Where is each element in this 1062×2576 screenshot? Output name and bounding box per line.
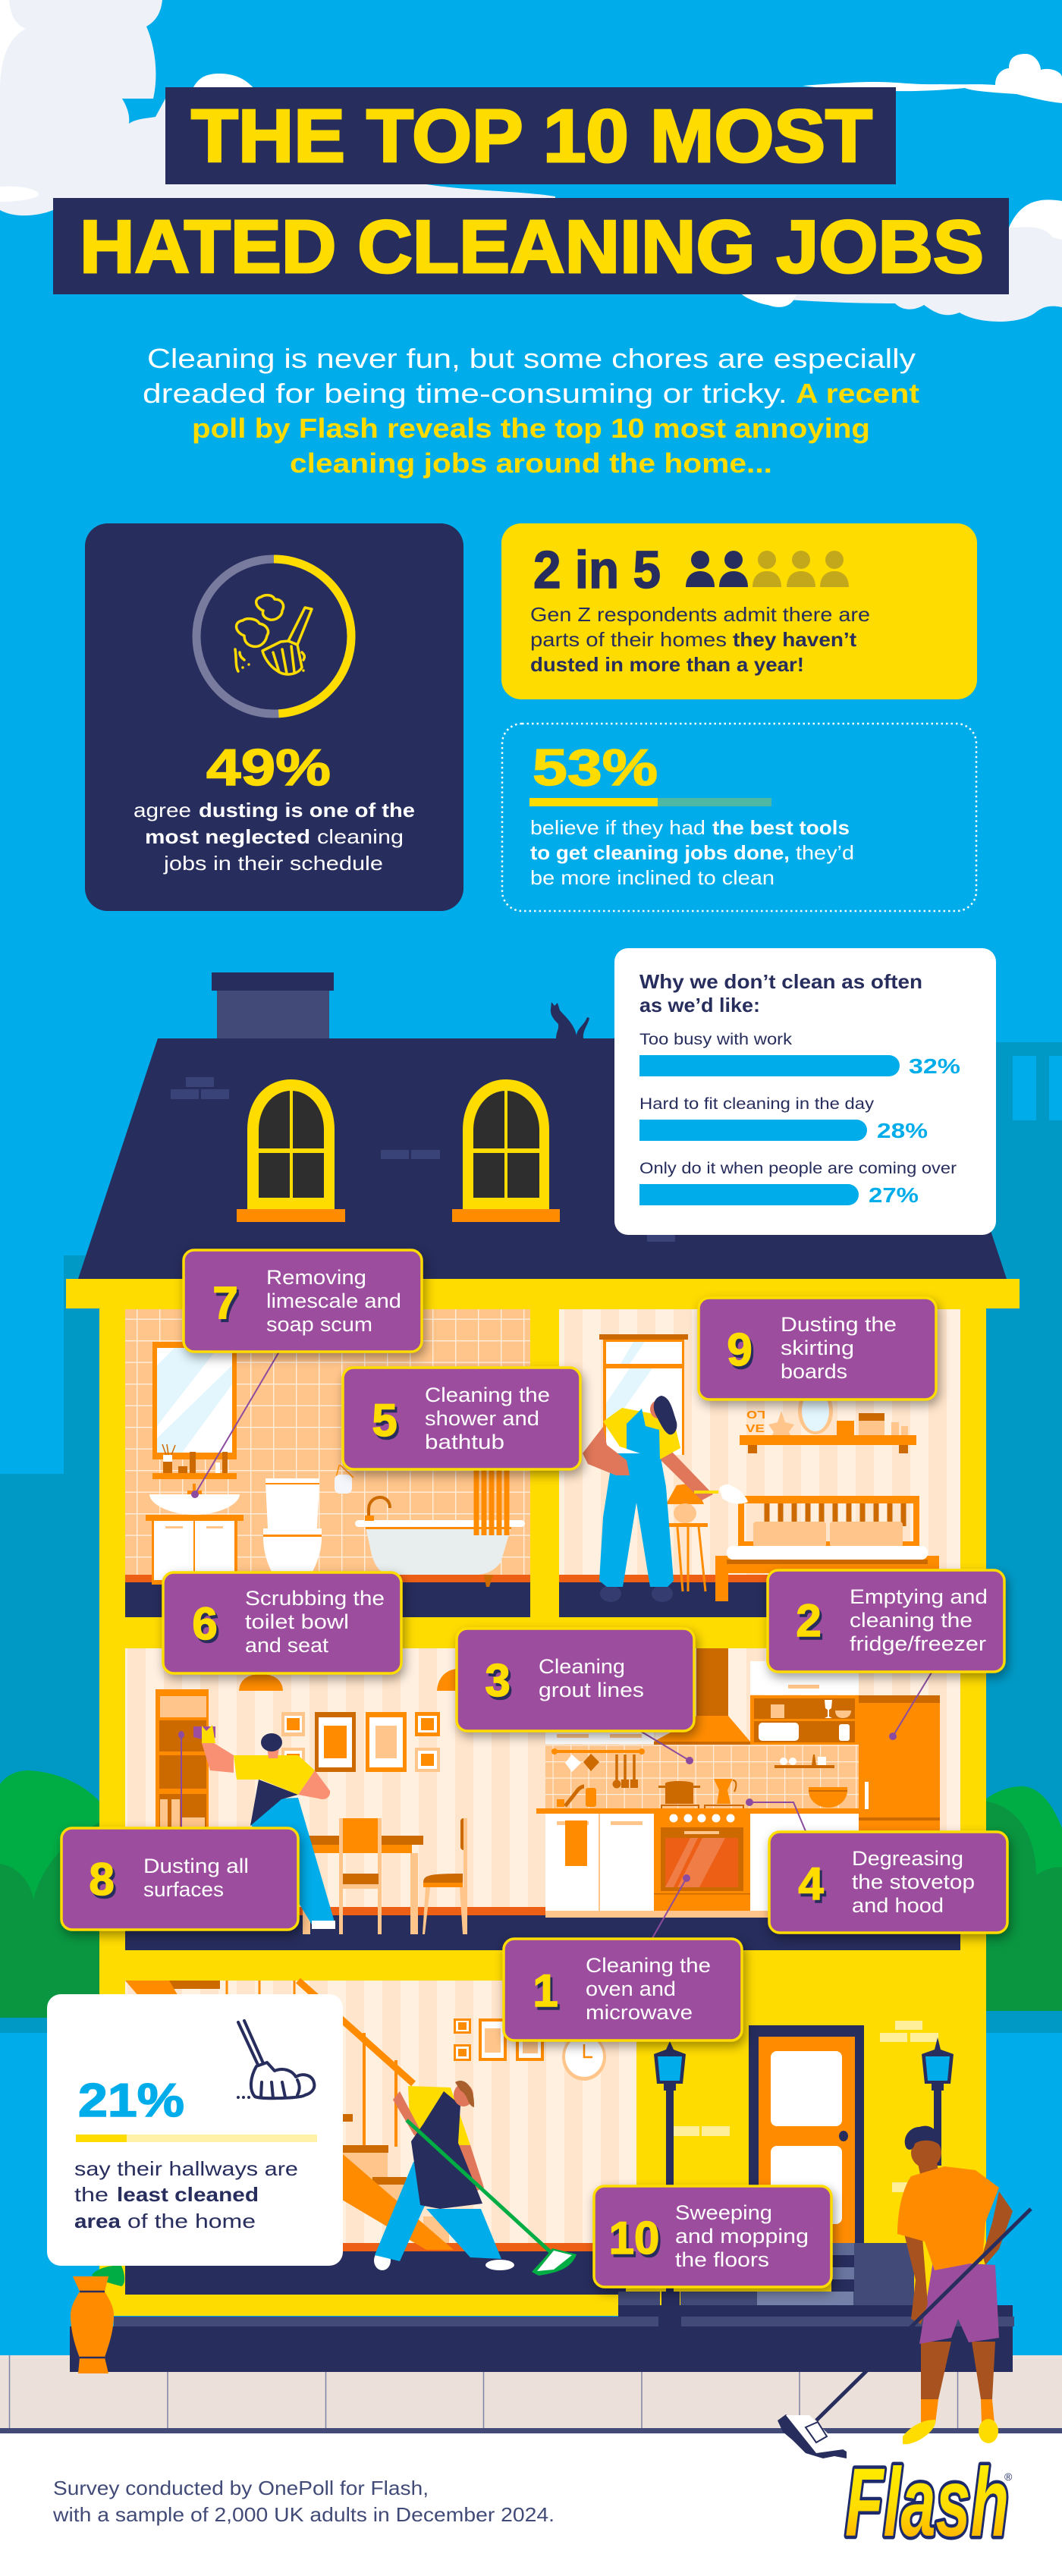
callout 7: 7	[215, 1280, 240, 1331]
callout 7	[184, 1250, 422, 1352]
callout 2	[768, 1570, 1004, 1672]
dusting stat text: cleaning	[317, 825, 404, 848]
icon: five people	[686, 551, 849, 587]
callout 7: soap scum	[266, 1313, 372, 1336]
stove pot and coffee maker	[658, 1779, 743, 1808]
clouds	[0, 0, 1062, 322]
roof	[78, 1038, 1007, 1279]
best tools text: be more inclined to clean	[530, 866, 775, 889]
bedroom shelf	[740, 1387, 916, 1453]
callout 7: 7	[212, 1277, 238, 1328]
vase with plant	[71, 2266, 124, 2373]
pavement	[0, 2355, 1062, 2576]
Gen Z text	[530, 603, 870, 676]
title: HATED CLEANING JOBS	[80, 205, 984, 288]
front door	[749, 2025, 864, 2243]
bedroom shelf: VE	[746, 1422, 765, 1435]
toilet	[263, 1478, 322, 1572]
dusting stat text: most neglected	[145, 825, 310, 848]
window right	[452, 1079, 560, 1222]
callout 4: the stovetop	[852, 1871, 975, 1893]
kitchen shelf and bowl	[775, 1755, 847, 1808]
picture frames	[281, 1712, 440, 1772]
panel: best tools stat	[502, 724, 976, 911]
21 percent bar	[76, 2135, 317, 2142]
bedroom window	[599, 1334, 688, 1455]
hallways text: say their hallways are	[74, 2157, 298, 2180]
chart heading	[639, 970, 922, 1016]
icon: broom and dust	[235, 595, 312, 674]
house walls	[66, 1279, 1020, 2316]
callout 10	[594, 2186, 831, 2287]
window left	[237, 1079, 345, 1222]
21 percent: 21%	[78, 2075, 184, 2127]
title	[53, 87, 1009, 294]
bar: too busy with work: Too busy with work	[639, 1031, 793, 1048]
leader lines	[178, 1352, 932, 1938]
callout 8: Dusting all	[143, 1855, 249, 1877]
callout 5: bathtub	[425, 1431, 504, 1453]
intro paragraph: dreaded for being time-consuming or tricky.	[143, 378, 787, 409]
ceiling lamps	[239, 1669, 459, 1691]
chimney	[212, 972, 334, 1039]
best tools text: the best tools	[712, 816, 850, 839]
progress ring 49%	[196, 559, 351, 714]
callout 6: Scrubbing the	[245, 1587, 385, 1610]
53 percent: 53%	[533, 739, 658, 796]
Gen Z text: parts of their homes	[530, 628, 727, 651]
backsplash utensils	[551, 1748, 645, 1807]
bathroom room	[125, 1309, 530, 1617]
survey footnote: Survey conducted by OnePoll for Flash,	[53, 2477, 429, 2499]
lamp and stool	[666, 1483, 708, 1591]
callout 10: Sweeping	[675, 2201, 772, 2224]
sink	[146, 1484, 244, 1585]
bathtub	[355, 1470, 525, 1587]
callout 6: 6	[192, 1598, 218, 1649]
hallways text	[74, 2157, 298, 2232]
callout 10: and mopping	[675, 2225, 809, 2248]
panel: hallways stat	[47, 1994, 343, 2266]
bar: hard to fit cleaning: Hard to fit cleaning in the day	[639, 1095, 875, 1113]
kitchen and dining room	[125, 1648, 960, 1950]
callout 1: oven and	[586, 1978, 676, 2000]
intro paragraph: poll by Flash reveals the top 10 most annoying	[192, 413, 870, 444]
best tools text: to get cleaning jobs done,	[530, 841, 790, 864]
callout 5: 5	[374, 1398, 400, 1449]
callout 4: and hood	[852, 1894, 944, 1917]
dusting stat text	[134, 799, 415, 875]
survey footnote	[52, 2477, 555, 2526]
callout 2: fridge/freezer	[850, 1632, 986, 1655]
street lamp right	[922, 2037, 954, 2166]
callout 3	[457, 1629, 694, 1731]
survey footnote: with a sample of 2,000 UK adults in December 2024.	[52, 2503, 555, 2526]
bar: too busy with work	[639, 1031, 960, 1078]
callout 9: boards	[781, 1360, 847, 1383]
bar: only when people are coming over	[639, 1160, 957, 1207]
street lamp left	[654, 2041, 686, 2316]
woman dusting	[583, 1396, 748, 1602]
callout 3: grout lines	[539, 1679, 644, 1701]
bushes	[0, 1770, 1062, 2018]
callout 6	[163, 1572, 401, 1673]
callout 6: toilet bowl	[245, 1610, 349, 1633]
callout 2: Emptying and	[850, 1585, 988, 1608]
bedroom room	[559, 1309, 960, 1617]
callout 3: 3	[487, 1658, 513, 1709]
callout 10: 10	[609, 2213, 659, 2263]
background buildings	[0, 1042, 1062, 2033]
callout 8: 8	[89, 1854, 115, 1905]
bar: only when people are coming over: Only do it when people are coming over	[639, 1160, 957, 1177]
hallways text: of the home	[127, 2210, 256, 2232]
icon: mop	[238, 2021, 314, 2098]
callout 4: 4	[800, 1861, 826, 1912]
hallways text: the	[74, 2183, 108, 2206]
intro paragraph	[143, 343, 919, 479]
house front exterior	[70, 2021, 1014, 2372]
callout 8: 8	[91, 1857, 117, 1908]
bathroom shelf	[152, 1444, 237, 1479]
best tools text	[530, 816, 854, 889]
dining table and chairs	[298, 1818, 467, 1934]
callout 5: Cleaning the	[425, 1384, 550, 1406]
bar: only when people are coming over: 27%	[869, 1183, 919, 1207]
intro paragraph: A recent	[796, 378, 919, 409]
49 percent: 49%	[206, 739, 331, 796]
best tools text: they’d	[796, 841, 854, 864]
callout 6: and seat	[245, 1634, 329, 1657]
dusting stat text: agree	[134, 799, 191, 821]
panel: why we don't clean bar chart	[614, 948, 996, 1235]
kitchen units	[536, 1648, 859, 1918]
man with mop	[778, 2126, 1031, 2458]
callout 8	[61, 1828, 298, 1930]
callout 9: 9	[729, 1327, 755, 1378]
bookcase	[156, 1689, 209, 1830]
dusting stat text: jobs in their schedule	[163, 852, 383, 875]
callout 1: 1	[533, 1965, 558, 2016]
intro paragraph: Cleaning is never fun, but some chores are especially	[147, 343, 916, 374]
callout 6: 6	[194, 1601, 220, 1652]
callout 4: Degreasing	[852, 1847, 963, 1870]
callout 7: limescale and	[266, 1290, 401, 1312]
hallways text: area	[74, 2210, 121, 2232]
chart heading: Why we don’t clean as often	[639, 970, 922, 993]
Gen Z text: Gen Z respondents admit there are	[530, 603, 870, 626]
callout 9: Dusting the	[781, 1313, 897, 1336]
callout 10: the floors	[675, 2248, 769, 2271]
mirror	[152, 1342, 237, 1459]
callout 1: 1	[535, 1968, 561, 2019]
callout 3: 3	[485, 1655, 511, 1706]
hallway room	[125, 1981, 636, 2295]
cat on roof	[551, 1002, 589, 1038]
wall clock	[562, 2034, 606, 2081]
dusting stat text: dusting is one of the	[199, 799, 415, 821]
callout 3: Cleaning	[539, 1655, 625, 1678]
callout 8: surfaces	[143, 1878, 224, 1901]
callout 10: 10	[611, 2216, 661, 2267]
callout 4: 4	[798, 1858, 824, 1909]
chart heading: as we’d like:	[639, 994, 760, 1016]
bar: hard to fit cleaning: 28%	[877, 1119, 928, 1142]
intro paragraph: cleaning jobs around the home...	[290, 448, 772, 479]
53 percent bar	[529, 798, 771, 806]
woman mopping	[374, 2081, 577, 2276]
callout 5: shower and	[425, 1407, 539, 1430]
callout 2: 2	[796, 1595, 822, 1646]
callout 2: cleaning the	[850, 1609, 972, 1632]
callout 9: skirting	[781, 1337, 854, 1359]
callout 2: 2	[798, 1598, 824, 1649]
Flash logo: ®	[1004, 2471, 1013, 2483]
callout 9: 9	[727, 1324, 753, 1375]
panel: dusting stat	[85, 523, 463, 911]
hallway frames	[454, 2018, 544, 2061]
best tools text: believe if they had	[530, 816, 705, 839]
panel: Gen Z stat	[501, 523, 977, 699]
bedroom shelf: LO	[746, 1408, 765, 1421]
callout 5: 5	[372, 1395, 397, 1446]
callout 5	[343, 1368, 580, 1469]
Gen Z text: they haven’t	[733, 628, 856, 651]
bar: hard to fit cleaning	[639, 1095, 928, 1142]
2 in 5: 2 in 5	[533, 540, 661, 599]
bed	[715, 1496, 939, 1601]
callout 7: Removing	[266, 1266, 366, 1289]
callout 1: microwave	[586, 2001, 693, 2024]
callout 1	[504, 1939, 742, 2040]
bar: too busy with work: 32%	[909, 1054, 960, 1078]
hanging towel	[335, 1465, 353, 1494]
man dusting surfaces	[193, 1725, 335, 1929]
callout 4	[769, 1832, 1007, 1933]
fridge	[859, 1695, 940, 1915]
title: THE TOP 10 MOST	[191, 94, 872, 177]
callout 1: Cleaning the	[586, 1954, 711, 1977]
hallways text: least cleaned	[117, 2183, 259, 2206]
callout 9	[699, 1298, 936, 1400]
Gen Z text: dusted in more than a year!	[530, 653, 804, 676]
